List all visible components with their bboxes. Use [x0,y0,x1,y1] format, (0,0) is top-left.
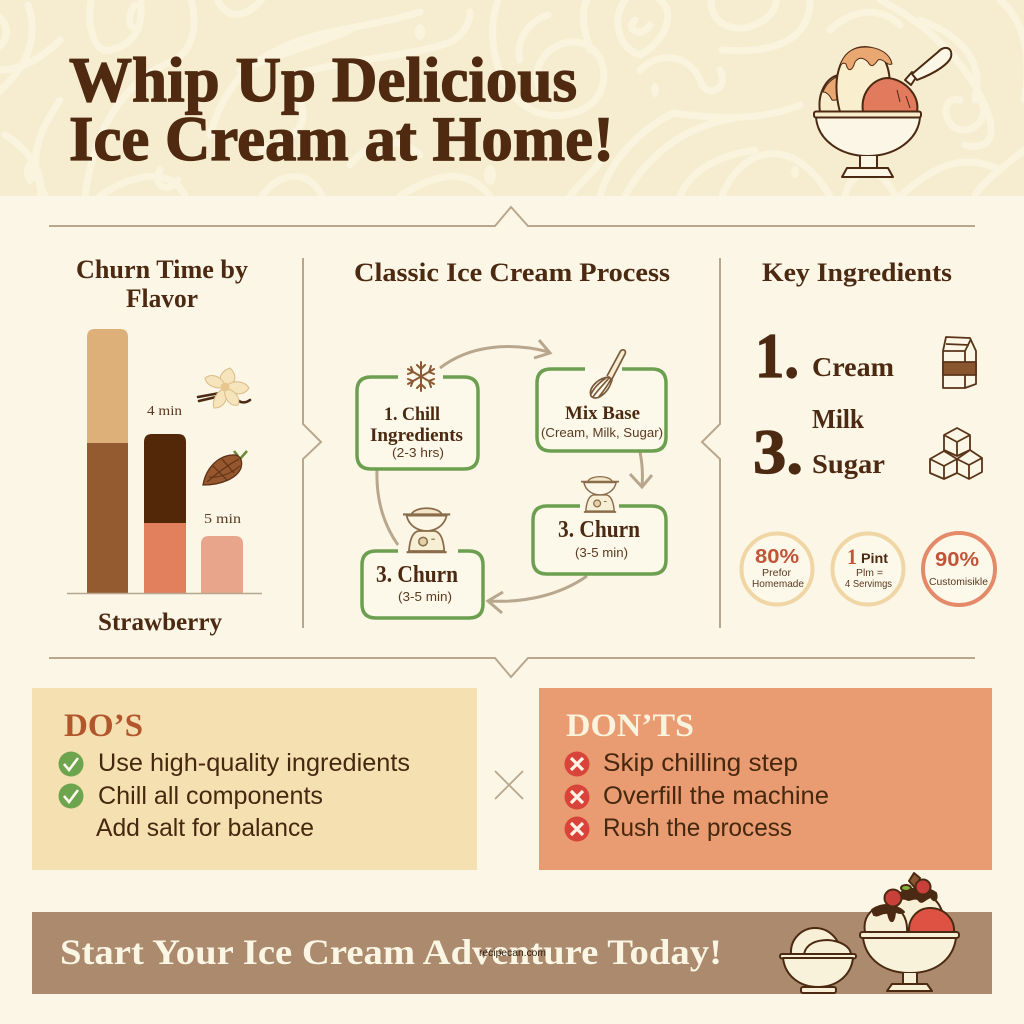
heading: don'ts: DON’TS [566,708,694,744]
icon: milk carton [943,337,976,388]
item: overfill: Overfill the machine [603,782,829,810]
heading: churn time: Flavor [126,284,198,313]
label: 4 min: 4 min [147,404,182,419]
panel: key ingredients [742,258,995,605]
ingredient: cream: 1. [755,320,799,391]
item: rush: Rush the process [603,814,792,842]
arrow: churn to chill [377,470,398,545]
call to action banner [32,912,992,994]
panel: churn time chart [67,255,262,636]
panel: process cycle [354,258,670,618]
banner text: Start Your Ice Cream Adventure Today! [60,932,722,972]
step: chill ingredients: (2-3 hrs) [392,446,444,460]
ingredient: cream: Cream [812,352,895,382]
item: chill components: Chill all components [98,782,323,810]
heading: process: Classic Ice Cream Process [354,258,670,287]
icon: sundae with cherries [860,873,959,991]
bar chart [67,329,262,594]
icon: whisk [590,350,625,398]
ingredient: cream [755,320,895,391]
icon: cross separator [495,771,523,799]
stat: 80% prefer homemade: Homemade [752,578,804,590]
title: Whip Up Delicious [69,45,577,115]
item: high-quality ingredients: Use high-quality ingredients [98,749,410,777]
step: churn right: 3. Churn [558,517,640,543]
panel: do's [32,688,477,870]
step: churn left: (3-5 min) [398,590,452,604]
stat: 90% customisable: Customisikle [929,577,988,588]
icon: sugar cubes [930,428,982,479]
heading: churn time [76,255,248,313]
header banner with swirl pattern [0,0,1024,196]
title: Ice Cream at Home! [69,104,614,174]
item: skip chilling: Skip chilling step [603,749,798,777]
title [69,45,614,174]
arrow: chill to mix [440,340,550,368]
icon: snowflake [408,362,434,391]
ingredient: sugar: 3. [753,416,803,487]
step: churn left [362,551,483,618]
step: chill ingredients: Ingredients [370,425,463,446]
icon: vanilla flower [198,368,250,408]
stat: 1 pint: 4 Servimgs [845,578,892,590]
watermark: recipecan.com [479,948,546,959]
ingredient: milk: Milk [812,404,864,434]
arrow: mix to churn [630,452,652,487]
step: mix base: Mix Base [565,403,640,424]
step: chill ingredients [357,377,478,469]
divider: left with chevron [303,258,321,628]
step: churn left: 3. Churn [376,562,458,588]
step: mix base [537,369,666,451]
icon: small bowl [780,928,856,993]
step: chill ingredients: 1. Chill [384,404,440,425]
stat: 80% prefer homemade: Prefor [762,567,792,579]
stat: 1 pint [832,534,904,604]
heading: ingredients: Key Ingredients [762,258,952,287]
label: 5 min: 5 min [204,512,241,527]
step: churn right: (3-5 min) [575,546,628,560]
heading: do's: DO’S [64,708,143,744]
icon: cocoa pod [203,451,247,485]
ingredient: sugar: Sugar [812,449,885,479]
label: strawberry: Strawberry [98,609,222,636]
stat: 90% customisable [923,533,995,605]
top divider [49,207,975,226]
arrow: churn to churn [488,576,587,613]
divider: right with chevron [702,258,720,628]
icon: mixer right [581,477,619,512]
step: churn right [533,506,666,574]
stat: 80% prefer homemade [742,534,812,604]
item: add salt: Add salt for balance [96,814,314,842]
stat: 80% prefer homemade: 80% [755,546,799,568]
stat: 1 pint: Plm = [856,567,883,579]
panel: don'ts [539,688,992,870]
bottom divider [49,658,975,677]
stat: 90% customisable: 90% [935,549,979,571]
ingredient: sugar [753,416,885,487]
heading: churn time: Churn Time by [76,255,248,284]
step: mix base: (Cream, Milk, Sugar) [541,426,663,440]
icon: ice cream bowl with spoon [814,47,951,177]
stat: 1 pint: Pint [861,551,889,566]
stat: 1 pint: 1 [847,544,857,569]
icon: mixer left [403,508,450,552]
